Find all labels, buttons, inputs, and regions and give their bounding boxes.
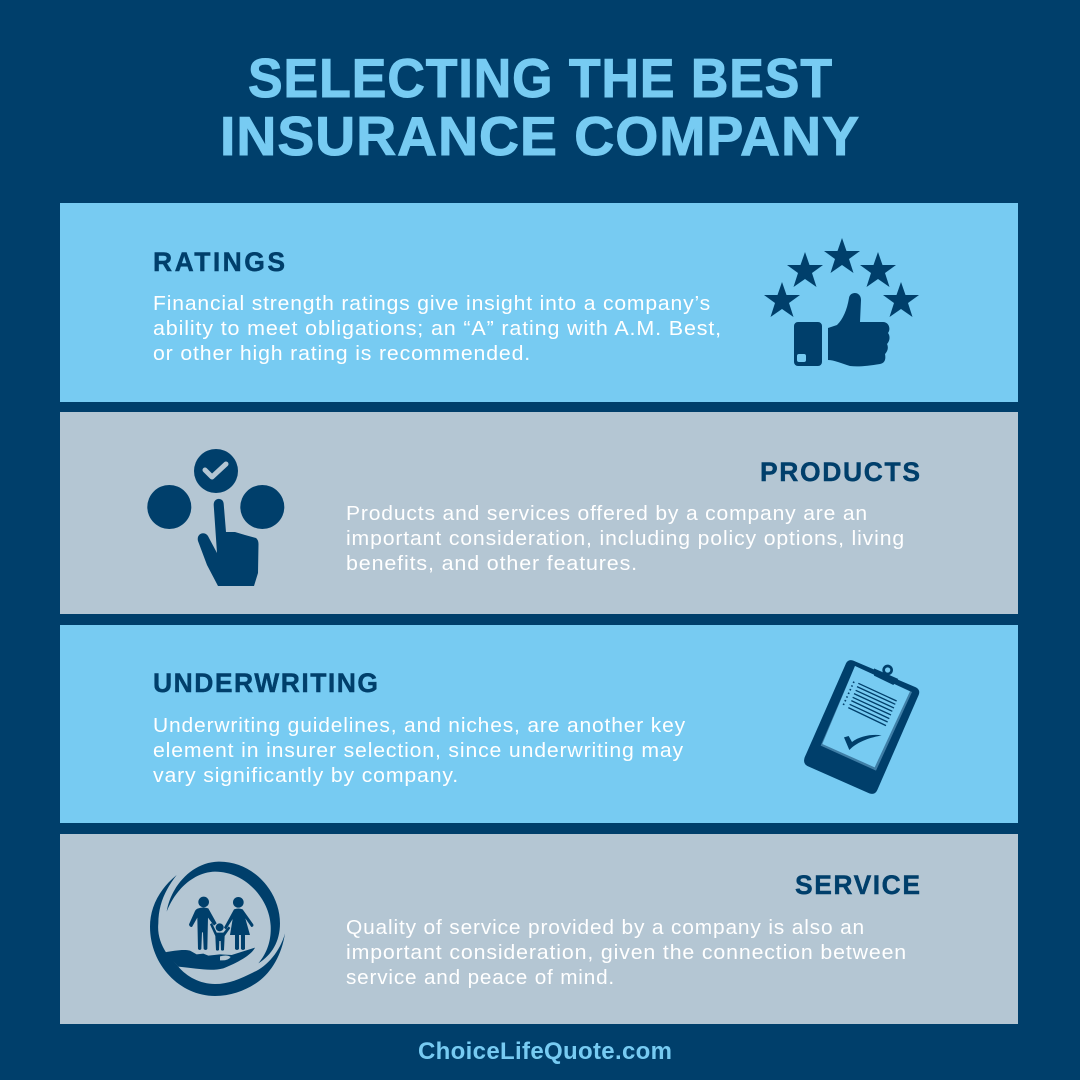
text: ratings description: [153, 293, 722, 365]
panel: ratings: [60, 203, 1018, 402]
text: ratings description: ability to meet obligations; an “A” rating with A.M. Best,: [153, 318, 722, 340]
panel: underwriting: [60, 625, 1018, 823]
text: service description: service and peace of mind.: [346, 967, 615, 989]
text: underwriting description: Underwriting guidelines, and niches, are another key: [153, 715, 686, 737]
text: underwriting description: [153, 715, 686, 787]
text: service description: important consideration, given the connection between: [346, 942, 907, 964]
heading: underwriting: UNDERWRITING: [153, 668, 378, 698]
title: INSURANCE COMPANY: [220, 105, 860, 167]
text: products description: benefits, and other features.: [346, 553, 638, 575]
text: products description: Products and services offered by a company are an: [346, 503, 868, 525]
icon: stars and thumbs up: [764, 238, 919, 366]
text: ratings description: or other high rating is recommended.: [153, 343, 531, 365]
text: service description: Quality of service provided by a company is also an: [346, 917, 865, 939]
heading: products: PRODUCTS: [760, 457, 920, 487]
text: underwriting description: vary significantly by company.: [153, 765, 459, 787]
text: products description: [346, 503, 905, 575]
footer: website: ChoiceLifeQuote.com: [418, 1038, 672, 1065]
title: [220, 47, 860, 167]
icon: clipboard with checkmark: [804, 660, 919, 794]
text: underwriting description: element in insurer selection, since underwriting may: [153, 740, 684, 762]
heading: service: SERVICE: [795, 870, 920, 900]
text: service description: [346, 917, 907, 989]
text: products description: important consideration, including policy options, living: [346, 528, 905, 550]
panel: service: [60, 834, 1018, 1024]
icon: family in caring hand: [150, 862, 285, 996]
heading: ratings: RATINGS: [153, 247, 285, 277]
panel: products: [60, 412, 1018, 614]
text: ratings description: Financial strength ratings give insight into a company’s: [153, 293, 711, 315]
title: SELECTING THE BEST: [248, 47, 833, 109]
icon: finger choosing option: [147, 449, 284, 586]
